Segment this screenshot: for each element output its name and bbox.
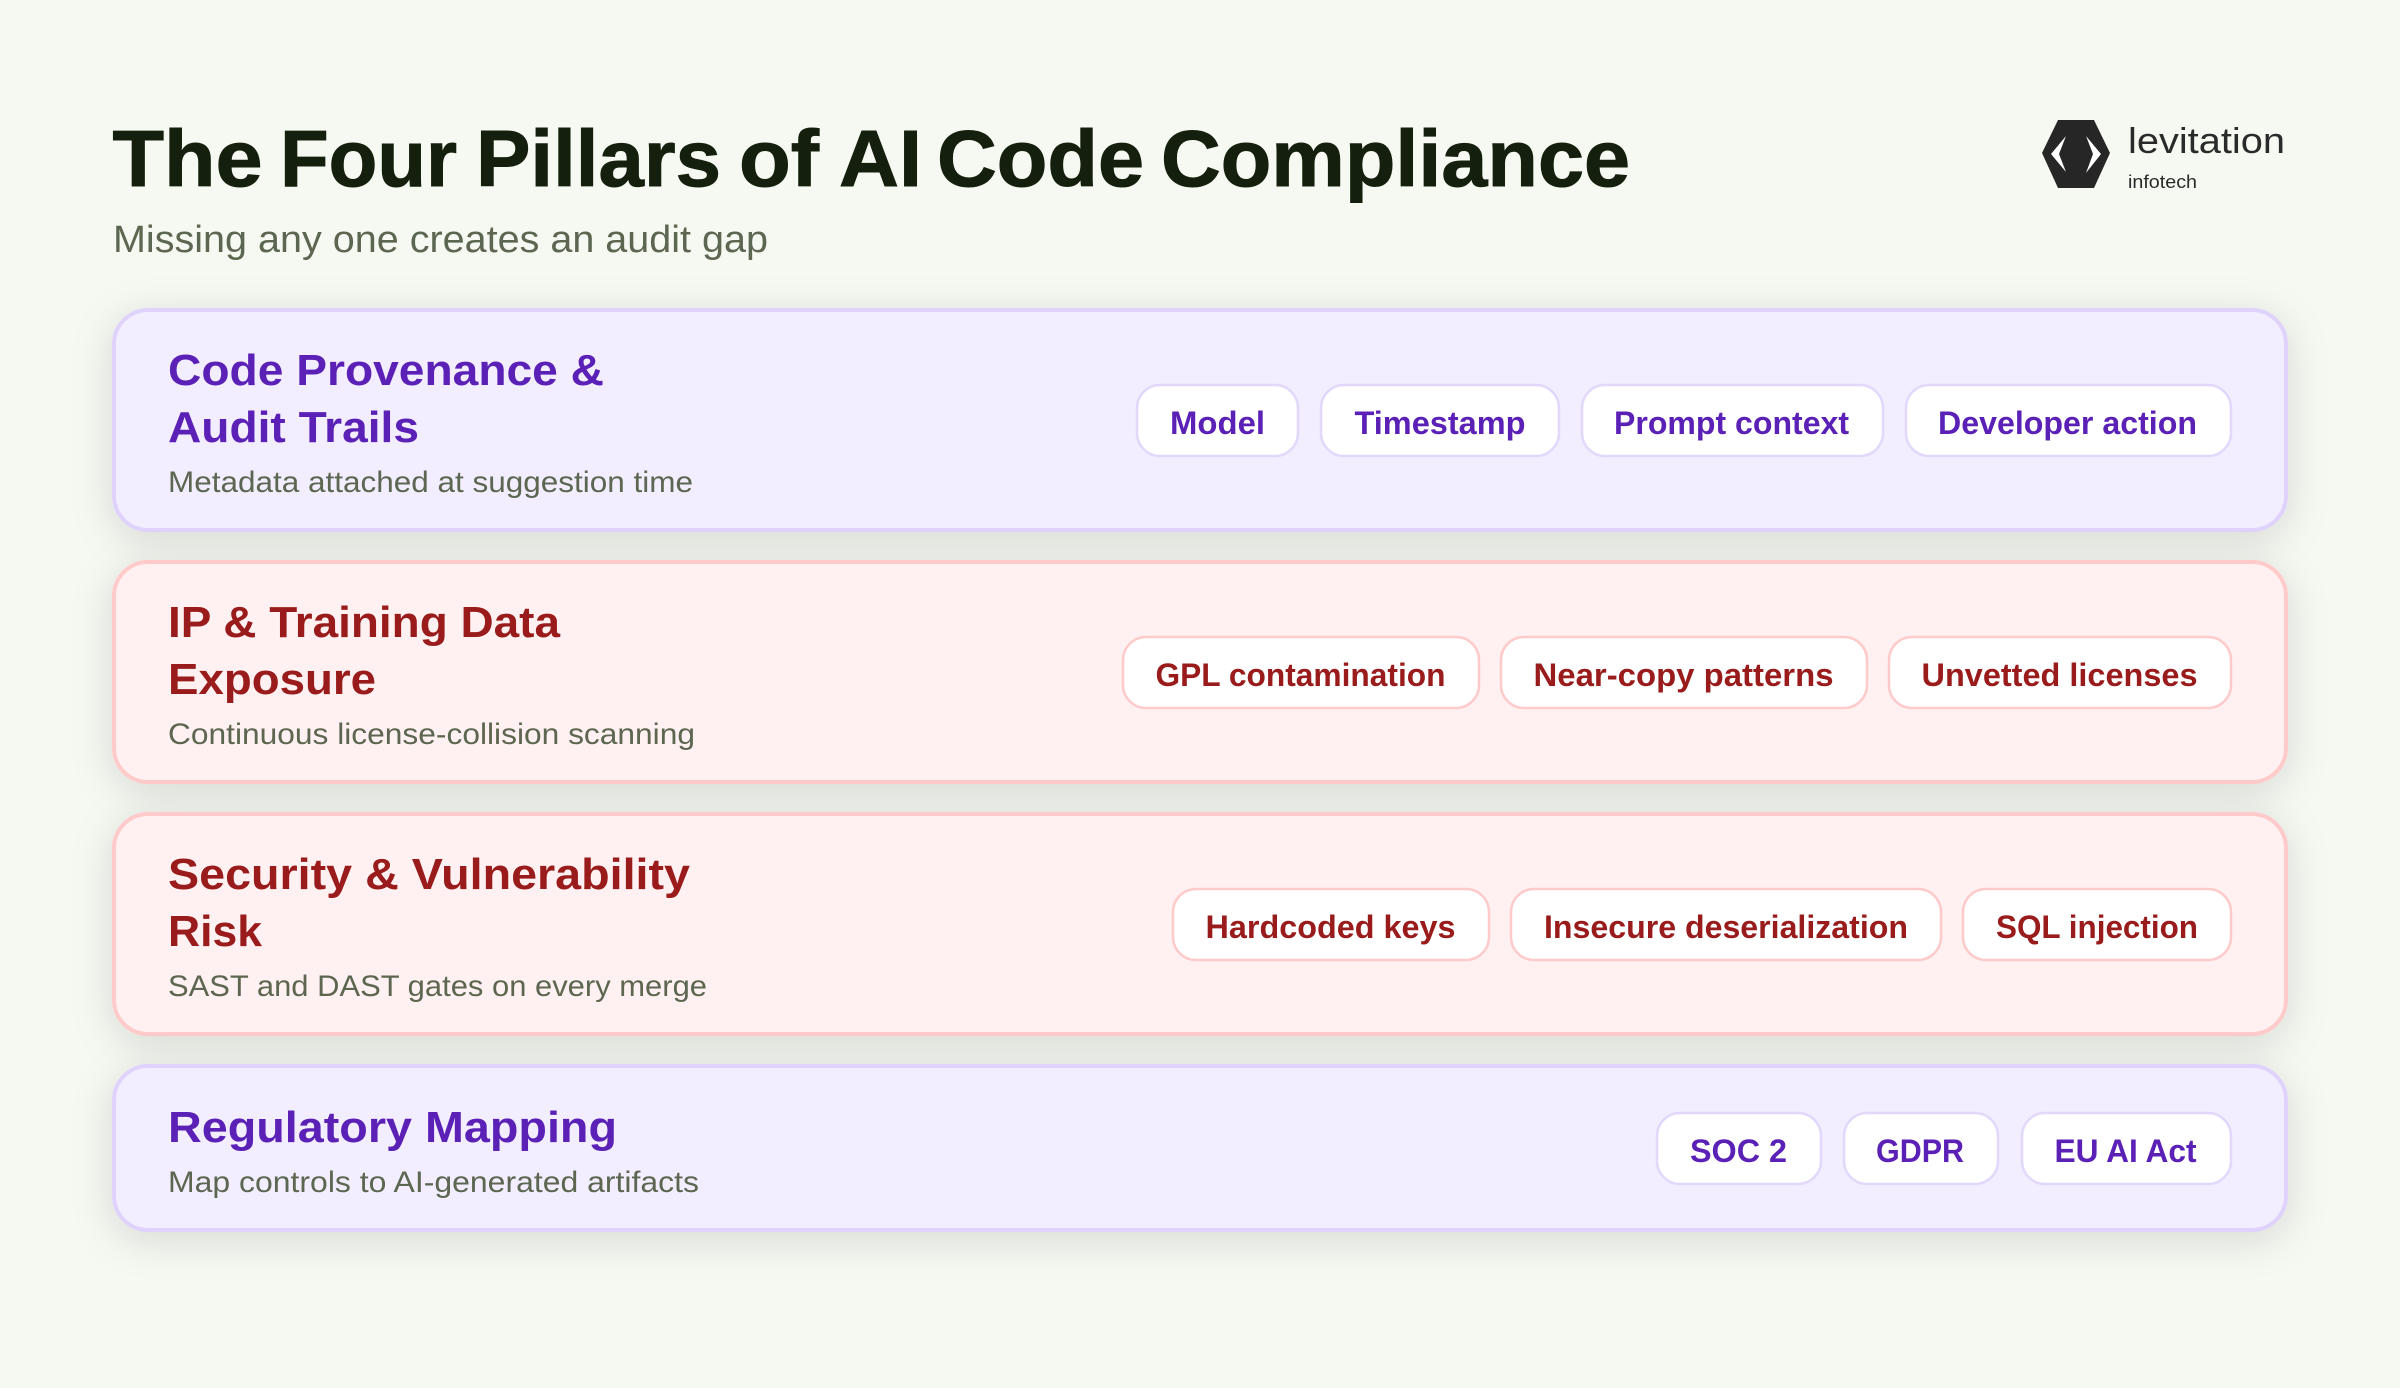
chip: prompt context: Prompt context	[1614, 405, 1849, 441]
panel description: Continuous license-collision scanning	[168, 718, 695, 751]
title: Code	[937, 114, 1144, 203]
chip: near-copy patterns	[1501, 637, 1867, 708]
title: Pillars	[476, 114, 721, 203]
panel description: SAST and DAST gates on every merge	[168, 970, 707, 1003]
panel description: Metadata attached at suggestion time	[168, 466, 693, 499]
chip: timestamp: Timestamp	[1354, 405, 1526, 441]
logo tagline: infotech	[2128, 172, 2197, 192]
logo wordmark: levitation	[2128, 120, 2285, 161]
logo: levitation infotech	[2042, 120, 2285, 192]
chip: developer action	[1906, 385, 2231, 456]
panel heading: Risk	[168, 907, 263, 956]
title: The	[112, 114, 262, 203]
chip: model: Model	[1170, 405, 1265, 441]
title: Four	[280, 114, 457, 203]
chip: near-copy patterns: Near-copy patterns	[1534, 657, 1834, 693]
chips	[1123, 637, 2231, 708]
chip: GDPR: GDPR	[1876, 1133, 1964, 1169]
panel: IP and training data exposure	[114, 562, 2286, 782]
panel: regulatory mapping	[114, 1066, 2286, 1230]
panel heading: Exposure	[168, 655, 376, 704]
panel: security and vulnerability risk	[114, 814, 2286, 1034]
chip: model	[1137, 385, 1298, 456]
panel background	[114, 814, 2286, 1034]
title: of	[739, 114, 819, 203]
chip: GDPR	[1844, 1113, 1998, 1184]
panel description: Map controls to AI-generated artifacts	[168, 1166, 699, 1199]
chip: unvetted licenses	[1889, 637, 2231, 708]
panel heading: Regulatory Mapping	[168, 1103, 617, 1152]
chip: GPL contamination: GPL contamination	[1156, 657, 1446, 693]
panel background	[114, 1066, 2286, 1230]
panel background	[114, 562, 2286, 782]
title: AI	[839, 114, 922, 203]
chip: EU AI Act	[2022, 1113, 2231, 1184]
chips	[1137, 385, 2231, 456]
chip: GPL contamination	[1123, 637, 1479, 708]
chips	[1173, 889, 2231, 960]
chip: SOC 2: SOC 2	[1690, 1133, 1787, 1169]
panel heading: Security & Vulnerability	[168, 850, 691, 899]
chip: insecure deserialization	[1511, 889, 1941, 960]
panel heading: IP & Training Data	[168, 598, 561, 647]
chip: developer action: Developer action	[1938, 405, 2197, 441]
chip: hardcoded keys: Hardcoded keys	[1206, 909, 1456, 945]
icon: hexagon code mark	[2042, 120, 2110, 188]
chip: SOC 2	[1657, 1113, 1821, 1184]
chips	[1657, 1113, 2231, 1184]
subtitle: Missing any one creates an audit gap	[113, 219, 768, 261]
chip: SQL injection: SQL injection	[1996, 909, 2198, 945]
chip: hardcoded keys	[1173, 889, 1489, 960]
title: Compliance	[1161, 114, 1630, 203]
chip: prompt context	[1582, 385, 1883, 456]
chip: SQL injection	[1963, 889, 2231, 960]
chip: EU AI Act: EU AI Act	[2054, 1133, 2197, 1169]
chip: timestamp	[1321, 385, 1559, 456]
panel heading: Code Provenance &	[168, 346, 604, 395]
chip: unvetted licenses: Unvetted licenses	[1922, 657, 2198, 693]
chip: insecure deserialization: Insecure deserialization	[1544, 909, 1908, 945]
panel heading: Audit Trails	[168, 403, 419, 452]
panel: code provenance and audit trails	[114, 310, 2286, 530]
panel background	[114, 310, 2286, 530]
